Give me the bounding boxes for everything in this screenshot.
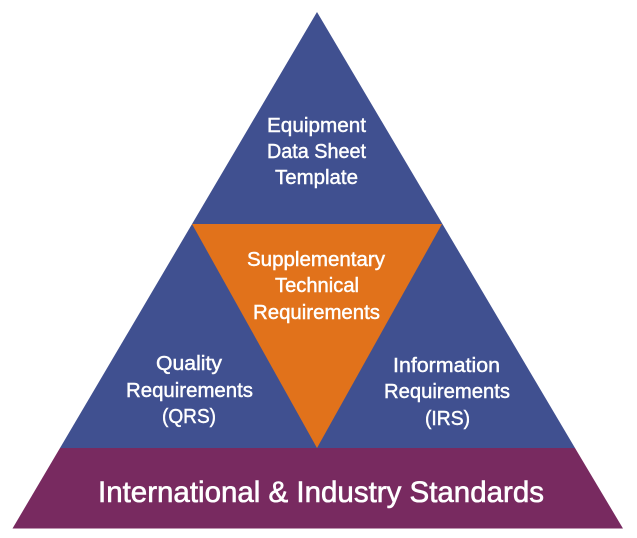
text: international and industry standards: International & Industry Standards [98, 476, 544, 509]
text: quality requirements: Requirements [126, 379, 253, 402]
text: supplementary technical requirements: Requirements [253, 301, 380, 324]
panel: blue pyramid upper section [60, 12, 575, 448]
text: equipment data sheet template [267, 114, 366, 189]
panel: supplementary technical requirements triangle [192, 224, 442, 448]
text: equipment data sheet template: Template [275, 166, 358, 189]
text: quality requirements: (QRS) [162, 405, 216, 428]
text: quality requirements [126, 352, 253, 428]
text: equipment data sheet template: Equipment [267, 114, 366, 137]
text: information requirements: Information [393, 354, 500, 377]
text: supplementary technical requirements [247, 248, 386, 324]
text: supplementary technical requirements: Technical [275, 274, 359, 297]
text: quality requirements: Quality [156, 352, 223, 375]
text: information requirements: (IRS) [425, 407, 470, 430]
panel: international and industry standards base [12, 448, 623, 528]
text: information requirements: Requirements [384, 380, 510, 403]
text: equipment data sheet template: Data Sheet [267, 140, 366, 163]
text: information requirements [384, 354, 510, 430]
text: supplementary technical requirements: Supplementary [247, 248, 386, 271]
